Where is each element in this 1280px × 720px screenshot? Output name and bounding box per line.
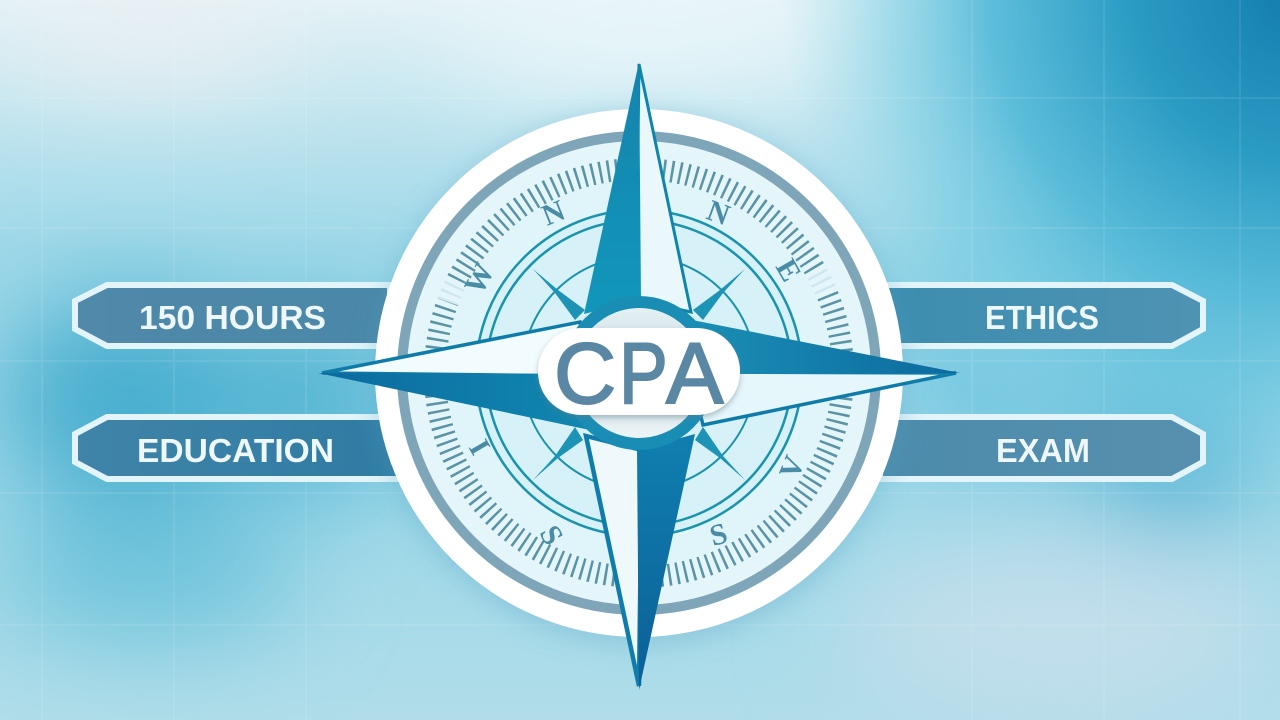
- cpa label: C: [554, 326, 616, 422]
- south arm: [586, 434, 695, 690]
- banner: education: EDUCATION: [137, 432, 334, 469]
- cpa label: P: [619, 325, 668, 421]
- compass star: [318, 62, 960, 690]
- compass rings: [476, 210, 802, 536]
- dial letters: [458, 194, 812, 553]
- dial letters: E: [769, 253, 808, 287]
- cpa label: A: [666, 326, 724, 422]
- tick marks: [435, 169, 843, 577]
- banner: 150 hours: 150 HOURS: [139, 299, 326, 336]
- banner: ethics: ETHICS: [985, 299, 1099, 336]
- banner: exam: [880, 417, 1203, 479]
- dial letters: N: [537, 194, 570, 233]
- dial letters: W: [458, 258, 501, 300]
- dial letters: S: [706, 517, 731, 553]
- north arm: [584, 62, 691, 314]
- banner: exam: EXAM: [996, 432, 1090, 469]
- cpa pill: [538, 325, 740, 422]
- cpa label: [554, 325, 724, 422]
- banner: 150 hours: [75, 285, 390, 346]
- diagonal points: [533, 269, 745, 480]
- dial letters: S: [533, 520, 570, 551]
- dial letters: I: [462, 434, 496, 461]
- east arm: [690, 320, 960, 425]
- dial letters: N: [702, 194, 734, 232]
- dial letters: V: [773, 451, 812, 484]
- central hub: [568, 302, 710, 444]
- banner: ethics: [880, 285, 1203, 346]
- compass dial: [371, 109, 907, 646]
- banner: education: [75, 417, 400, 479]
- west arm: [318, 322, 590, 430]
